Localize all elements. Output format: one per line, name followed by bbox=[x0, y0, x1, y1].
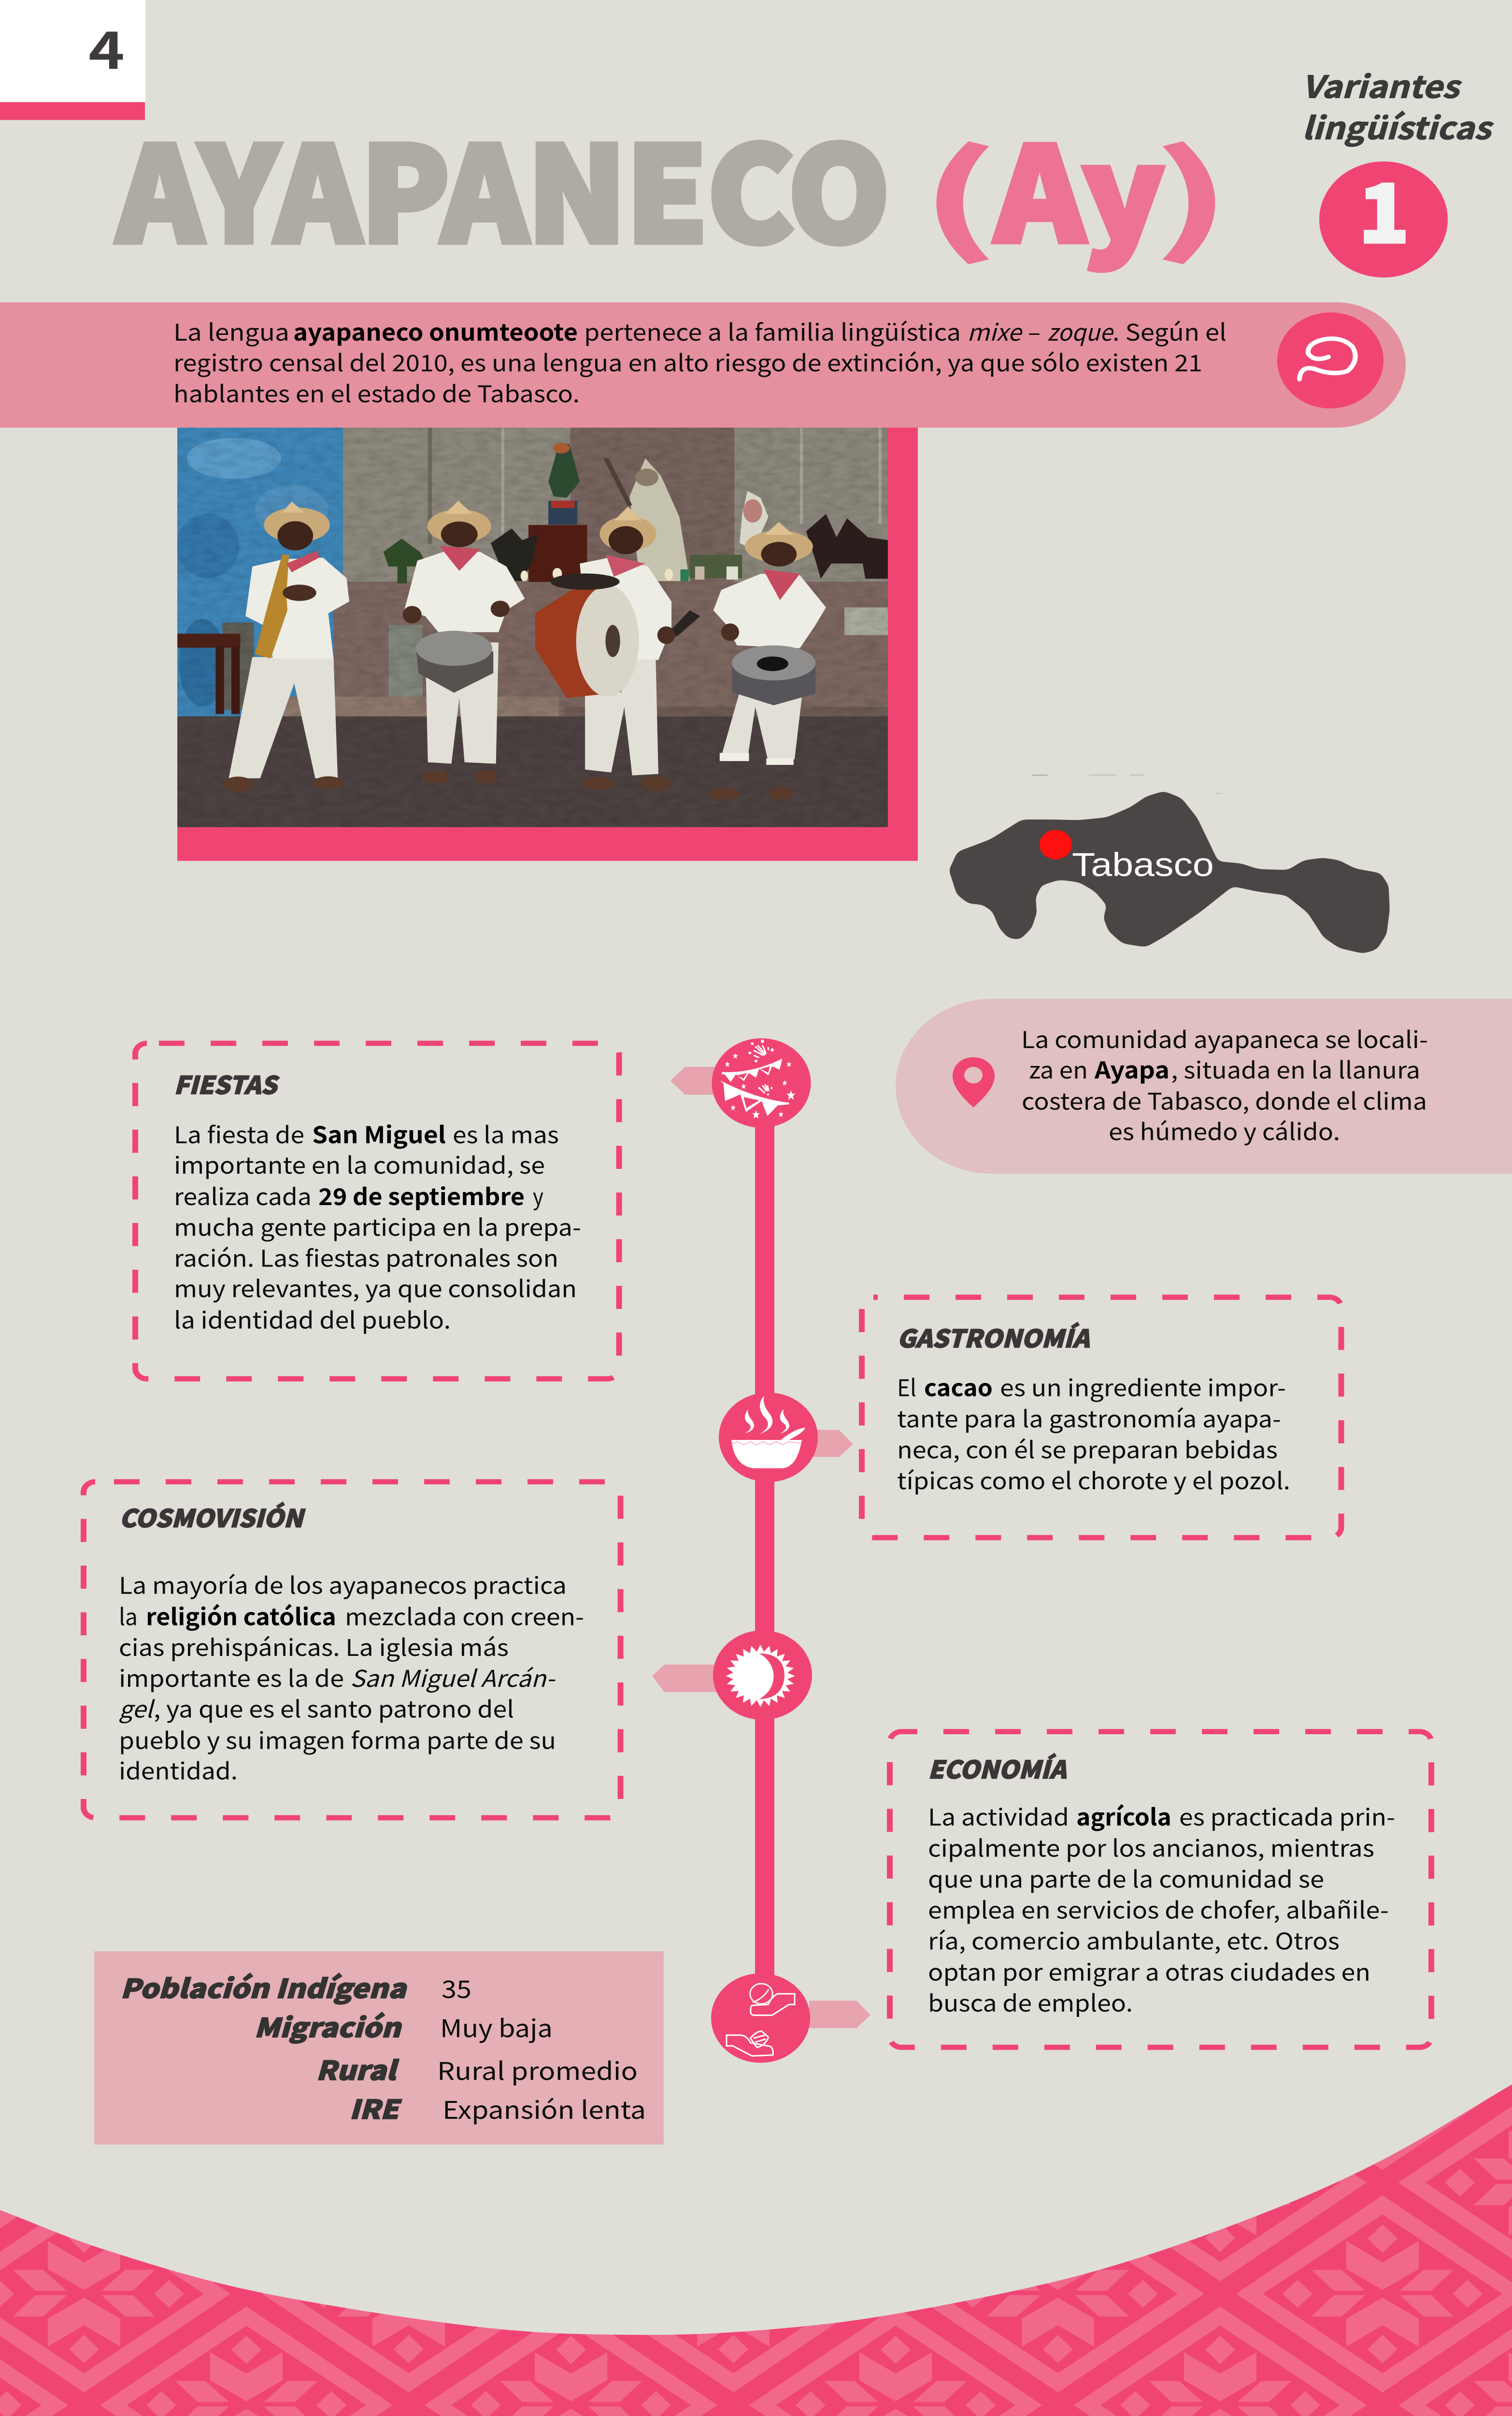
text: intro: pertenece a la familia lingüística bbox=[584, 314, 961, 347]
heading: fiestas: FIESTAS bbox=[174, 1066, 280, 1101]
text: economía: que una parte de la comunidad se bbox=[928, 1861, 1324, 1895]
heading: cosmovisión: COSMOVISIÓN bbox=[119, 1499, 306, 1535]
panel: statistics bbox=[94, 1951, 664, 2144]
stat: IRE bbox=[349, 2089, 646, 2127]
decorative woven pattern footer bbox=[0, 2085, 1512, 2416]
timeline node: gastronomía bbox=[719, 1393, 853, 1482]
icon: steaming bowl bbox=[731, 1396, 805, 1468]
text: cosmovisión: San Miguel Arcán- bbox=[350, 1660, 556, 1694]
timeline spine bbox=[755, 1083, 774, 2018]
text: fiestas: La fiesta de bbox=[174, 1116, 304, 1150]
text: location: Ayapa bbox=[1094, 1051, 1170, 1085]
text: intro: La lengua bbox=[173, 314, 289, 347]
text: cosmovisión: identidad. bbox=[119, 1753, 238, 1786]
text: economía bbox=[928, 1798, 1395, 2018]
text: intro: hablantes en el estado de Tabasco. bbox=[173, 375, 580, 409]
text: intro: ayapaneco onumteoote bbox=[293, 314, 578, 347]
icon: hands exchanging cacao bbox=[727, 1984, 795, 2056]
text: fiestas: muy relevantes, ya que consolidan bbox=[174, 1270, 577, 1304]
heading: economía: ECONOMÍA bbox=[928, 1751, 1067, 1786]
text: cosmovisión: importante es la de bbox=[119, 1660, 344, 1694]
text: location bbox=[1021, 1021, 1428, 1147]
text: intro bbox=[173, 314, 1227, 409]
title: Ay bbox=[993, 91, 1164, 280]
icon: location pin bbox=[953, 1057, 995, 1107]
stat: rural: Rural bbox=[316, 2050, 399, 2088]
text: location: costera de Tabasco, donde el clima bbox=[1022, 1082, 1427, 1117]
panel: intro band bbox=[0, 302, 1406, 428]
text: cosmovisión bbox=[119, 1567, 584, 1786]
text: economía: es practicada prin- bbox=[1179, 1798, 1395, 1832]
text: fiestas: San Miguel bbox=[312, 1116, 446, 1150]
panel: location callout bbox=[896, 999, 1512, 1174]
stat: migración bbox=[254, 2008, 553, 2045]
title: ( bbox=[919, 104, 999, 274]
musician: saxophonist bbox=[224, 502, 349, 792]
stat: población indígena: 35 bbox=[442, 1970, 471, 2005]
musician: snare drummer bbox=[403, 501, 525, 784]
text: cosmovisión: la bbox=[119, 1598, 138, 1632]
text: location: La comunidad ayapaneca se locali- bbox=[1021, 1021, 1428, 1055]
text: intro: – bbox=[1028, 314, 1041, 347]
text: intro: registro censal del 2010, es una lengua en alto riesgo de extinción, ya que sólo existen 21 bbox=[173, 345, 1202, 378]
icon: sun and moon bbox=[726, 1645, 795, 1707]
map label: Tabasco bbox=[1072, 847, 1214, 883]
text: economía: optan por emigrar a otras ciudades en bbox=[928, 1954, 1370, 1987]
heading: gastronomía: GASTRONOMÍA bbox=[897, 1320, 1090, 1355]
text: gastronomía: típicas como el chorote y el pozol. bbox=[897, 1462, 1290, 1496]
text: economía: La actividad bbox=[928, 1798, 1069, 1832]
musician: second snare drummer bbox=[708, 522, 826, 800]
text: cosmovisión: , ya que es el santo patrono del bbox=[154, 1690, 514, 1724]
text: cosmovisión: religión católica bbox=[146, 1598, 336, 1632]
heading: variantes lingüísticas: lingüísticas bbox=[1302, 104, 1494, 148]
text: gastronomía: tante para la gastronomía ayapa- bbox=[897, 1400, 1281, 1434]
icon: festive banners bbox=[720, 1040, 795, 1119]
badge: variant number: 1 bbox=[1358, 149, 1410, 266]
text: gastronomía bbox=[897, 1369, 1290, 1496]
text: cosmovisión: gel bbox=[119, 1690, 156, 1724]
text: fiestas bbox=[174, 1116, 581, 1336]
map marker: Ayapa bbox=[1040, 830, 1072, 859]
text: intro: mixe bbox=[967, 314, 1023, 347]
stat: IRE: Expansión lenta bbox=[442, 2091, 646, 2126]
heading: variantes lingüísticas: Variantes bbox=[1302, 63, 1462, 107]
text: economía: emplea en servicios de chofer, albañile- bbox=[928, 1892, 1389, 1926]
text: gastronomía: cacao bbox=[924, 1369, 993, 1403]
text: cosmovisión: La mayoría de los ayapanecos practica bbox=[119, 1567, 567, 1601]
icon: speech scroll bbox=[1277, 313, 1384, 408]
stat: rural bbox=[316, 2050, 638, 2088]
text: fiestas: y bbox=[533, 1178, 543, 1212]
title: ) bbox=[1153, 104, 1232, 274]
badge: variant number bbox=[1319, 149, 1448, 277]
page number tab: 4 bbox=[88, 10, 125, 84]
title: AYAPANECO bbox=[115, 91, 890, 280]
text: gastronomía: es un ingrediente impor- bbox=[1000, 1369, 1286, 1403]
text: cosmovisión: mezclada con creen- bbox=[345, 1598, 584, 1632]
map: Tabasco bbox=[949, 775, 1390, 954]
text: cosmovisión: pueblo y su imagen forma parte de su bbox=[119, 1722, 556, 1756]
text: economía: ría, comercio ambulante, etc. Otros bbox=[928, 1923, 1340, 1956]
text: economía: cipalmente por los ancianos, mientras bbox=[928, 1829, 1374, 1864]
photo: musicians in church bbox=[176, 427, 888, 827]
text: location: es húmedo y cálido. bbox=[1109, 1113, 1340, 1147]
text: location: , situada en la llanura bbox=[1171, 1051, 1420, 1085]
text: intro: zoque bbox=[1047, 314, 1114, 347]
text: location: za en bbox=[1029, 1051, 1088, 1085]
heading: variantes lingüísticas bbox=[1302, 63, 1494, 148]
text: fiestas: importante en la comunidad, se bbox=[174, 1147, 545, 1180]
stat: rural: Rural promedio bbox=[437, 2052, 638, 2087]
text: fiestas: es la mas bbox=[453, 1116, 559, 1150]
text: gastronomía: neca, con él se preparan bebidas bbox=[897, 1431, 1278, 1465]
panel: economía bbox=[890, 1732, 1431, 2047]
stat: migración: Muy baja bbox=[440, 2009, 553, 2044]
text: fiestas: mucha gente participa en la prepa- bbox=[174, 1208, 581, 1243]
panel: photo frame bbox=[176, 425, 918, 861]
panel: cosmovisión bbox=[84, 1482, 620, 1818]
text: fiestas: la identidad del pueblo. bbox=[174, 1302, 451, 1336]
text: economía: busca de empleo. bbox=[928, 1985, 1133, 2018]
text: economía: agrícola bbox=[1076, 1798, 1171, 1832]
panel: fiestas bbox=[135, 1043, 619, 1379]
stat: IRE: IRE bbox=[349, 2089, 402, 2127]
text: cosmovisión: cias prehispánicas. La iglesia más bbox=[119, 1629, 509, 1663]
photo texture bbox=[177, 427, 888, 827]
panel: gastronomía bbox=[862, 1297, 1341, 1538]
text: gastronomía: El bbox=[897, 1369, 916, 1403]
text: fiestas: realiza cada bbox=[174, 1178, 312, 1212]
timeline node: cosmovisión bbox=[652, 1630, 812, 1720]
timeline node: fiestas bbox=[670, 1038, 811, 1128]
text: fiestas: ración. Las fiestas patronales son bbox=[174, 1240, 558, 1274]
timeline node: economía bbox=[711, 1973, 870, 2063]
text: fiestas: 29 de septiembre bbox=[318, 1178, 525, 1212]
stat: población indígena: Población Indígena bbox=[120, 1968, 408, 2006]
page number tab bbox=[0, 0, 145, 120]
musician: bass drummer bbox=[535, 506, 700, 791]
stat: migración: Migración bbox=[254, 2008, 402, 2045]
text: intro: . Según el bbox=[1113, 314, 1227, 347]
